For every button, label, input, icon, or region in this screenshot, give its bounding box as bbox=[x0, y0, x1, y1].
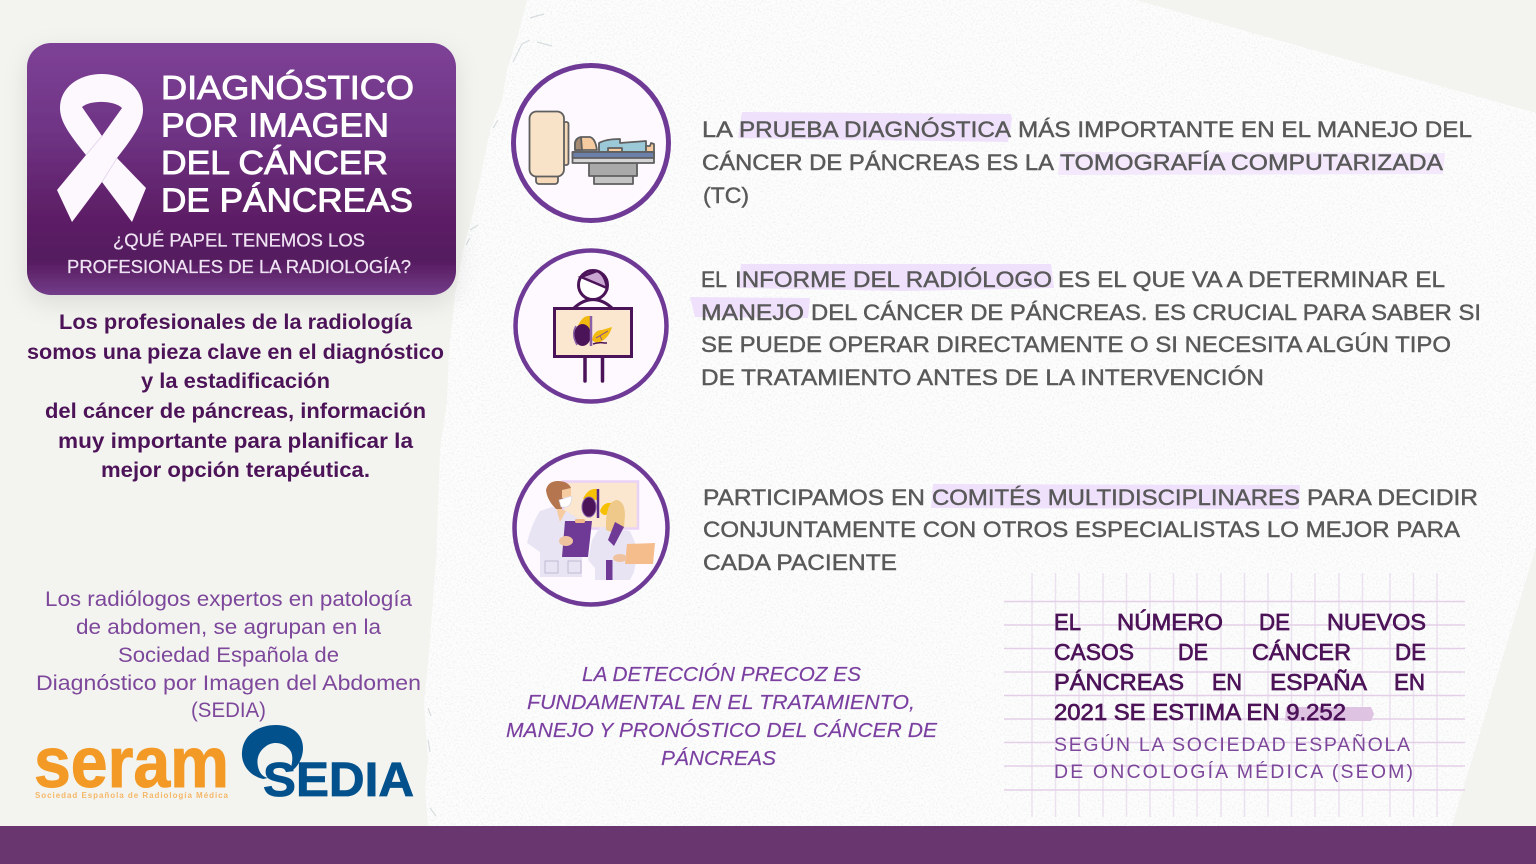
statistic text: NUEVOS bbox=[1327, 609, 1426, 635]
statistic text bbox=[1054, 609, 1426, 725]
statistic text: DE bbox=[1395, 639, 1426, 665]
statistic text: CASOS bbox=[1054, 639, 1134, 665]
statistic text: EN bbox=[1212, 669, 1242, 695]
logo: SERAM: seram bbox=[34, 724, 229, 803]
intro text block: muy importante para planificar la bbox=[58, 430, 413, 453]
left doctor bbox=[527, 481, 592, 577]
text block: committees: PARTICIPAMOS EN bbox=[703, 485, 925, 510]
torn paper background bbox=[420, 0, 1536, 826]
SEDIA text block: Diagnóstico por Imagen del Abdomen bbox=[36, 672, 421, 695]
text block: radiologist report: EL bbox=[701, 267, 727, 292]
highlight: 9.252 bbox=[1285, 707, 1374, 721]
text block: CT: TOMOGRAFÍA COMPUTARIZADA bbox=[1060, 150, 1443, 175]
callout: early detection: MANEJO Y PRONÓSTICO DEL CÁNCER DE bbox=[506, 719, 937, 742]
heading: DE PÁNCREAS bbox=[161, 182, 413, 220]
intro text block bbox=[27, 311, 444, 482]
source text: SEGÚN LA SOCIEDAD ESPAÑOLA bbox=[1054, 732, 1410, 756]
highlight: prueba diagnóstica bbox=[738, 112, 1012, 142]
icon: radiologist with pancreas screen bbox=[516, 250, 666, 402]
text block: radiologist report bbox=[690, 264, 1481, 390]
icon: awareness ribbon bbox=[57, 74, 146, 222]
text block: committees: CONJUNTAMENTE CON OTROS ESPECIALISTAS LO MEJOR PARA bbox=[703, 517, 1460, 542]
intro text block: mejor opción terapéutica. bbox=[101, 459, 370, 482]
icon: CT scanner bbox=[514, 66, 668, 220]
text block: committees: PARA DECIDIR bbox=[1307, 485, 1478, 510]
text block: radiologist report: SE PUEDE OPERAR DIRECTAMENTE O SI NECESITA ALGÚN TIPO bbox=[701, 332, 1451, 357]
text block: radiologist report: MANEJO bbox=[701, 300, 804, 325]
subheading: PROFESIONALES DE LA RADIOLOGÍA? bbox=[67, 256, 411, 277]
intro text block: y la estadificación bbox=[141, 370, 330, 393]
SEDIA text block bbox=[36, 588, 421, 722]
heading bbox=[161, 69, 414, 220]
heading: DIAGNÓSTICO bbox=[161, 69, 414, 107]
text block: CT: LA bbox=[702, 117, 733, 142]
text block: CT: CÁNCER DE PÁNCREAS ES LA bbox=[702, 150, 1054, 175]
intro text block: Los profesionales de la radiología bbox=[59, 311, 412, 334]
text block: radiologist report: DE TRATAMIENTO ANTES DE LA INTERVENCIÓN bbox=[701, 365, 1264, 390]
statistic text: PÁNCREAS bbox=[1054, 669, 1184, 695]
icon: doctors at multidisciplinary committee bbox=[514, 452, 668, 604]
heading: POR IMAGEN bbox=[161, 108, 389, 144]
statistic text: ESPAÑA bbox=[1270, 669, 1368, 695]
text block: committees bbox=[703, 484, 1478, 575]
intro text block: somos una pieza clave en el diagnóstico bbox=[27, 341, 444, 364]
callout: early detection: FUNDAMENTAL EN EL TRATAMIENTO, bbox=[527, 691, 915, 714]
text block: committees: COMITÉS MULTIDISCIPLINARES bbox=[932, 485, 1300, 510]
title card bbox=[27, 43, 456, 295]
SEDIA text block: (SEDIA) bbox=[191, 699, 266, 722]
callout: early detection: LA DETECCIÓN PRECOZ ES bbox=[582, 663, 861, 686]
text block: committees: CADA PACIENTE bbox=[703, 550, 897, 575]
SEDIA text block: Los radiólogos expertos en patología bbox=[45, 588, 412, 611]
subheading bbox=[67, 230, 411, 277]
highlight: informe del radiólogo bbox=[739, 264, 1054, 291]
highlight: comités multidisciplinares bbox=[931, 484, 1300, 509]
text block: radiologist report: INFORME DEL RADIÓLOGO bbox=[735, 267, 1052, 292]
bottom band bbox=[0, 826, 1536, 864]
statistic text: CÁNCER bbox=[1252, 639, 1351, 665]
SEDIA text block: Sociedad Española de bbox=[118, 644, 339, 667]
subheading: ¿QUÉ PAPEL TENEMOS LOS bbox=[113, 230, 365, 250]
statistic text: NÚMERO bbox=[1117, 609, 1223, 635]
text block: CT bbox=[702, 112, 1472, 208]
highlight: manejo bbox=[690, 297, 810, 318]
statistic text: 2021 SE ESTIMA EN 9.252 bbox=[1054, 699, 1346, 725]
source text bbox=[1054, 732, 1413, 783]
right doctor bbox=[588, 500, 655, 580]
icon: pancreas and kidney bbox=[574, 316, 612, 346]
grid paper panel with statistic bbox=[1004, 573, 1465, 817]
callout: early detection: PÁNCREAS bbox=[661, 747, 776, 770]
statistic text: EL bbox=[1054, 609, 1081, 635]
logo: SEDIA bbox=[242, 725, 414, 807]
text block: radiologist report: ES EL QUE VA A DETERMINAR EL bbox=[1058, 267, 1445, 292]
text block: CT: MÁS IMPORTANTE EN EL MANEJO DEL bbox=[1018, 117, 1472, 142]
statistic text: EN bbox=[1394, 669, 1425, 695]
text block: radiologist report: DEL CÁNCER DE PÁNCREAS. ES CRUCIAL PARA SABER SI bbox=[811, 300, 1481, 325]
intro text block: del cáncer de páncreas, información bbox=[45, 400, 426, 423]
statistic text: DE bbox=[1259, 609, 1290, 635]
text block: CT: PRUEBA DIAGNÓSTICA bbox=[739, 117, 1011, 142]
callout: early detection bbox=[506, 663, 937, 770]
logo: SERAM: Sociedad Española de Radiología Médica bbox=[35, 791, 229, 800]
heading: DEL CÁNCER bbox=[161, 145, 388, 182]
text block: CT: (TC) bbox=[703, 183, 749, 208]
statistic text: DE bbox=[1178, 639, 1208, 665]
SEDIA text block: de abdomen, se agrupan en la bbox=[76, 616, 381, 639]
highlight: tomografía computarizada bbox=[1058, 152, 1445, 175]
source text: DE ONCOLOGÍA MÉDICA (SEOM) bbox=[1054, 760, 1413, 783]
logo: SEDIA: SEDIA bbox=[263, 754, 414, 807]
